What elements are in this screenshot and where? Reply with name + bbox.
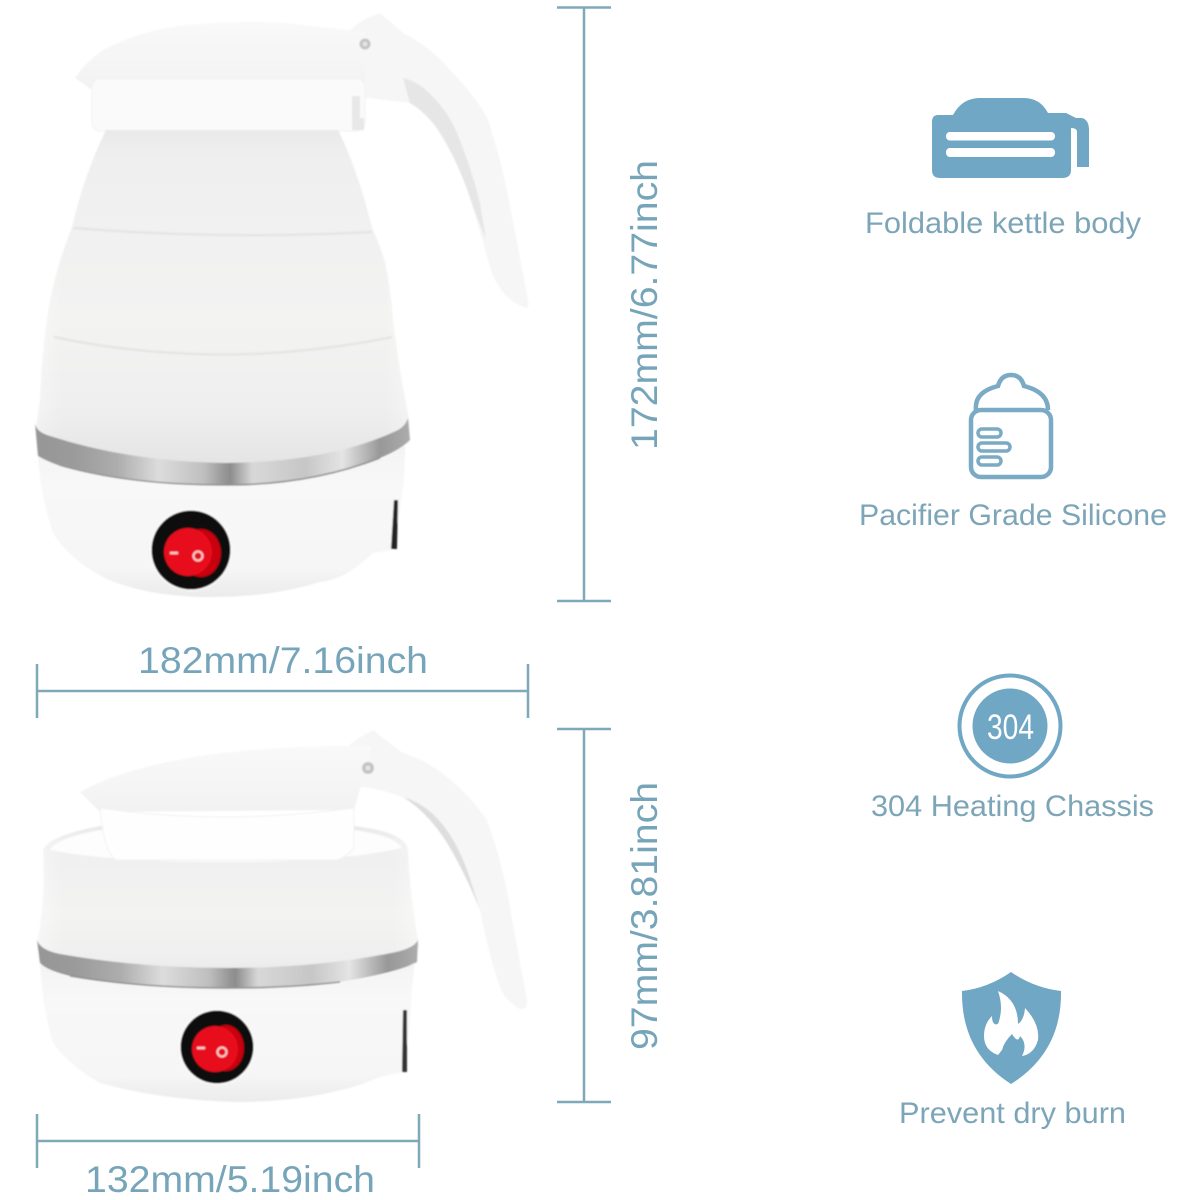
kettle handle [345, 13, 528, 308]
folded power switch [179, 1009, 255, 1085]
dimension: folded width: 132mm/5.19inch [85, 1159, 375, 1200]
dimension: folded height: 97mm/3.81inch [624, 782, 665, 1050]
body inner rim [50, 830, 402, 862]
icon: 304 badge: 304 [987, 708, 1034, 747]
feature: pacifier grade silicone [859, 375, 1167, 532]
heating base [38, 445, 405, 597]
dimension: full height [557, 7, 665, 601]
handle inner shadow [403, 78, 486, 240]
product photo: folded kettle [37, 730, 527, 1102]
folded lid [80, 746, 372, 812]
icon: folded kettle [932, 98, 1089, 178]
folded plug slot [402, 1010, 407, 1072]
collapsed body [37, 826, 419, 990]
dimension: full height: 172mm/6.77inch [624, 160, 665, 450]
lid collar [92, 79, 365, 131]
feature: 304 heating chassis [871, 676, 1154, 823]
label: Prevent dry burn [899, 1097, 1126, 1130]
product photo: full-size kettle [35, 13, 528, 597]
body fold lines [54, 228, 392, 354]
dimension: folded height [557, 729, 665, 1102]
label: Foldable kettle body [865, 207, 1141, 240]
icon: 304 badge [960, 676, 1060, 776]
dimension: folded width [37, 1114, 419, 1200]
folded lid collar [100, 808, 354, 860]
collapsible silicone body [36, 130, 410, 475]
folded handle shadow [403, 797, 480, 910]
folded heating base [40, 963, 414, 1102]
icon: baby bottle [971, 375, 1051, 477]
kettle lid [75, 22, 365, 90]
feature: foldable kettle body [865, 98, 1141, 240]
power switch [150, 509, 232, 591]
power plug slot [391, 500, 398, 549]
hinge clip [352, 96, 364, 130]
label: Pacifier Grade Silicone [859, 499, 1167, 532]
dimension: full width [37, 640, 528, 718]
folded steel ring [37, 940, 418, 988]
dimension: full width: 182mm/7.16inch [138, 640, 428, 681]
lid hinge pin [360, 38, 370, 50]
folded kettle handle [345, 730, 527, 1009]
label: 304 Heating Chassis [871, 790, 1154, 823]
feature: prevent dry burn [899, 972, 1126, 1130]
icon: flame shield [962, 972, 1061, 1084]
folded lid hinge pin [362, 762, 374, 774]
steel ring [35, 418, 410, 485]
